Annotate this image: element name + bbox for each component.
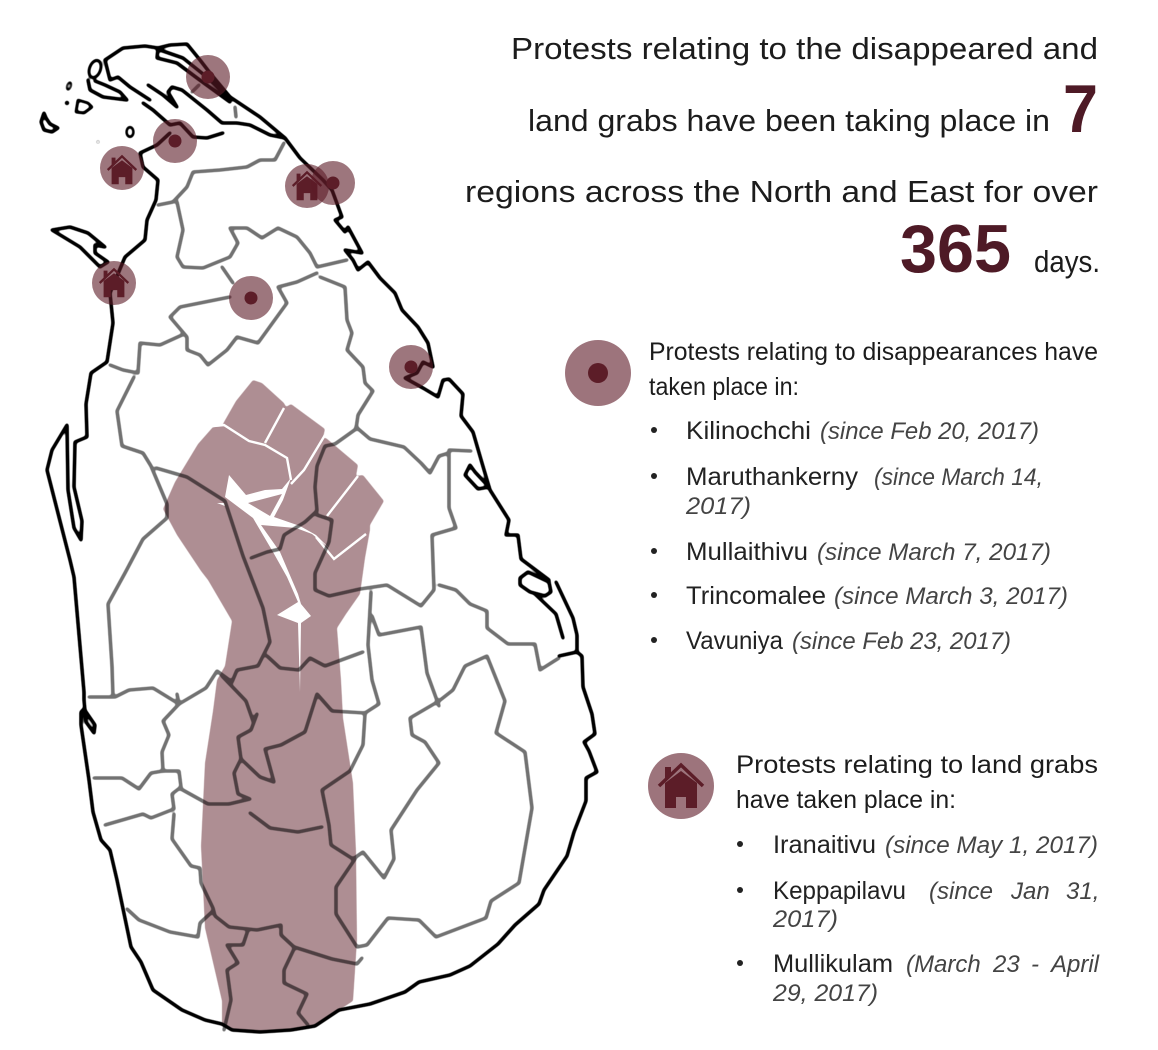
legend: land grabs: have taken place in:: [736, 786, 956, 814]
headline: days.: [1034, 244, 1100, 279]
list: disappearance protest sites: Mullaithivu: [686, 538, 808, 566]
headline: Protests relating to the disappeared and: [511, 31, 1098, 66]
marker: disappearances, Vavuniya: [229, 276, 273, 320]
marker: disappearances, Trincomalee: [389, 345, 433, 389]
marker: disappearances, Kilinochchi: [153, 119, 197, 163]
marker: disappearances, Kilinochchi north: [186, 55, 230, 99]
list: disappearance protest sites: (since Feb 20, 2017): [820, 418, 1039, 445]
list: land grab protest sites: 23: [992, 951, 1020, 978]
icon: disappearance dot: [565, 340, 631, 406]
marker: land grab, Iranaitivu: [100, 146, 144, 190]
list: disappearance protest sites: (since March 7, 2017): [817, 539, 1051, 566]
list: disappearance protest sites: (since March 3, 2017): [834, 583, 1068, 610]
list: disappearance protest sites: 2017): [685, 493, 751, 520]
marker: land grab, Keppapilavu: [285, 164, 329, 208]
coastline: [41, 44, 597, 1032]
legend: land grabs: [648, 751, 1100, 1007]
list: land grab protest sites: Iranaitivu: [773, 831, 876, 859]
list: disappearance protest sites: (since March 14,: [874, 464, 1043, 491]
stat: 365 days: 365: [900, 211, 1011, 287]
headline: land grabs have been taking place in: [528, 103, 1050, 138]
legend: disappearances: [565, 338, 1098, 655]
list: disappearance protest sites: Maruthankerny: [686, 463, 859, 491]
legend: disappearances: taken place in:: [649, 373, 799, 401]
list: land grab protest sites: [737, 831, 1100, 1007]
list: land grab protest sites: Keppapilavu: [773, 877, 906, 905]
marker: land grab, Mullikulam: [92, 261, 136, 305]
markers: protest locations: [92, 55, 433, 389]
headline: [465, 31, 1100, 287]
headline: regions across the North and East for over: [465, 174, 1098, 209]
stat: 7 regions: 7: [1063, 71, 1098, 147]
list: land grab protest sites: (since: [929, 878, 993, 905]
list: land grab protest sites: April: [1049, 951, 1100, 978]
list: disappearance protest sites: [651, 417, 1068, 655]
fist silhouette: [163, 380, 384, 1032]
list: land grab protest sites: 2017): [772, 906, 838, 933]
list: disappearance protest sites: Vavuniya: [686, 627, 783, 655]
map: Sri Lanka with raised fist: [41, 44, 597, 1032]
list: land grab protest sites: 29, 2017): [772, 980, 878, 1007]
legend: disappearances: Protests relating to disappearances have: [649, 338, 1098, 366]
list: land grab protest sites: 31,: [1066, 878, 1099, 905]
list: land grab protest sites: Jan: [1010, 878, 1050, 905]
list: disappearance protest sites: (since Feb 23, 2017): [792, 628, 1011, 655]
list: disappearance protest sites: Trincomalee: [686, 582, 826, 610]
list: land grab protest sites: -: [1031, 951, 1039, 978]
icon: house: [648, 753, 714, 819]
marker: disappearances, Mullaithivu: [311, 161, 355, 205]
list: land grab protest sites: (since May 1, 2017): [885, 832, 1098, 859]
list: land grab protest sites: (March: [906, 951, 981, 978]
list: disappearance protest sites: Kilinochchi: [686, 417, 811, 445]
legend: land grabs: Protests relating to land grabs: [736, 751, 1098, 779]
district boundaries: [89, 85, 559, 1030]
list: land grab protest sites: Mullikulam: [773, 950, 893, 978]
